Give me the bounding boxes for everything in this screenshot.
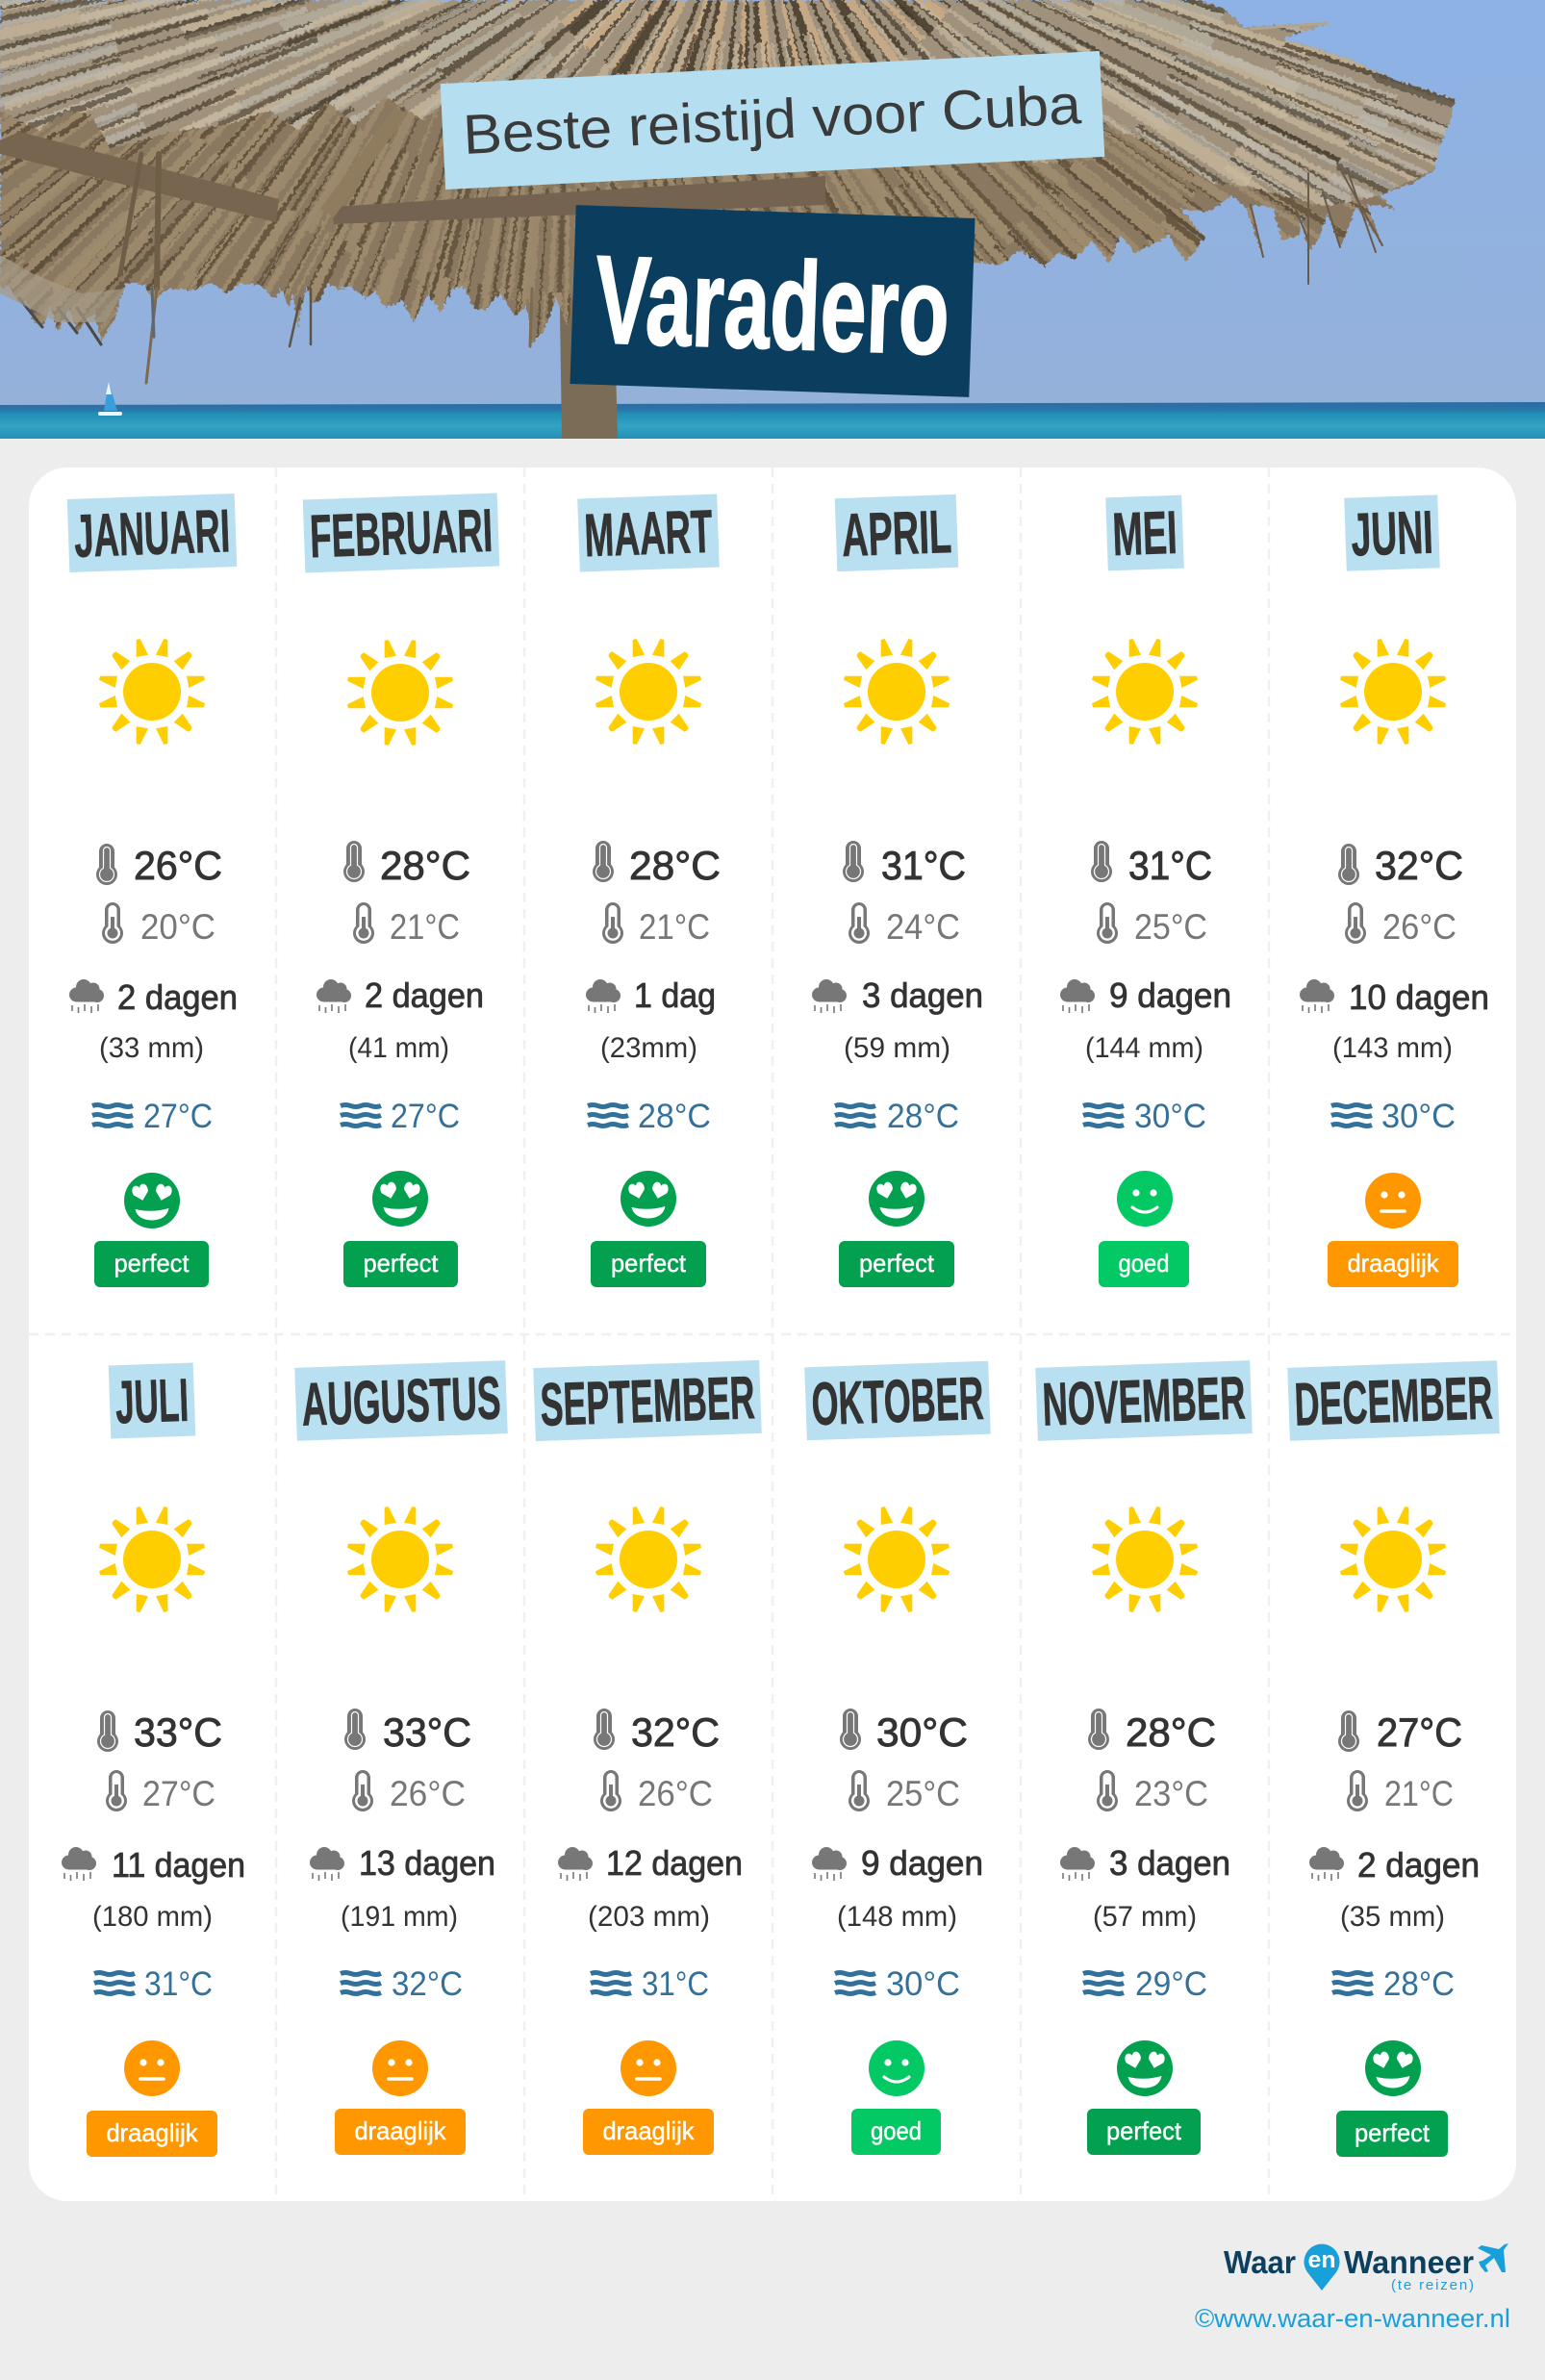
rain days [812, 975, 983, 1015]
max temperature: 33°C [383, 1709, 471, 1755]
rating badge [87, 2111, 217, 2157]
icon: location pin with en [1304, 2244, 1340, 2291]
month heading [577, 494, 720, 572]
min temperature: 21°C [639, 907, 710, 947]
rain days [69, 977, 238, 1017]
logo word: Wanneer: Wanneer [1344, 2244, 1474, 2280]
water temperature: 28°C [1383, 1965, 1455, 2003]
min temperature [848, 902, 960, 947]
max temperature [593, 841, 721, 888]
water temperature [92, 1098, 213, 1135]
water temperature [1332, 1965, 1455, 2003]
rating badge [591, 1241, 706, 1287]
icon: sun [1092, 1506, 1198, 1612]
rating badge [1099, 1241, 1189, 1287]
rating badge: goed [1118, 1249, 1170, 1278]
month heading [835, 494, 958, 571]
min temperature [602, 902, 710, 947]
icon: sun [1340, 639, 1446, 745]
water temperature [341, 1965, 463, 2003]
max temperature: 26°C [134, 843, 222, 888]
month: juni [1300, 494, 1489, 1287]
logo word: Waar: Waar [1224, 2244, 1296, 2280]
min temperature: 20°C [140, 907, 215, 947]
month: januari [67, 494, 238, 1287]
icon: airplane [1478, 2243, 1508, 2272]
panel: climate table card [29, 468, 1516, 2201]
max temperature [1338, 1709, 1462, 1755]
min temperature: 21°C [1384, 1774, 1454, 1813]
min temperature: 26°C [390, 1774, 466, 1813]
sailboat [98, 382, 122, 416]
icon: sun [347, 1506, 453, 1612]
max temperature: 28°C [629, 843, 721, 888]
month heading [67, 494, 237, 572]
month heading: AUGUSTUS [300, 1364, 502, 1439]
water temperature: 28°C [638, 1098, 711, 1135]
rainfall: (35 mm) [1340, 1901, 1445, 1933]
water temperature: 31°C [642, 1965, 709, 2003]
month heading: JUNI [1350, 499, 1434, 569]
rating badge [1328, 1241, 1458, 1287]
rating smiley [1117, 2040, 1173, 2096]
water temperature: 29°C [1135, 1965, 1207, 2003]
max temperature [1088, 1709, 1216, 1755]
rating badge: draaglijk [106, 2118, 198, 2147]
rating badge: perfect [1106, 2116, 1182, 2145]
max temperature: 27°C [1377, 1709, 1462, 1755]
rating badge: perfect [1355, 2118, 1431, 2147]
max temperature: 33°C [134, 1709, 222, 1755]
rating smiley [621, 1171, 676, 1227]
rainfall: (23mm) [600, 1032, 697, 1064]
rating badge [583, 2109, 714, 2155]
max temperature [97, 1709, 222, 1755]
rainfall: (180 mm) [92, 1901, 213, 1933]
max temperature [1338, 843, 1463, 888]
rating badge [1336, 2111, 1448, 2157]
rating badge: perfect [114, 1249, 190, 1278]
rating smiley [1365, 1173, 1421, 1228]
rainfall: (143 mm) [1332, 1032, 1453, 1064]
min temperature [352, 1770, 466, 1813]
rain days: 3 dagen [862, 975, 983, 1015]
rating badge: draaglijk [354, 2116, 446, 2145]
rating badge [851, 2109, 941, 2155]
min temperature: 25°C [1134, 907, 1207, 947]
min temperature [102, 902, 215, 947]
icon: sun [595, 639, 701, 745]
water temperature [1331, 1098, 1456, 1135]
min temperature: 24°C [886, 907, 960, 947]
max temperature [1091, 841, 1212, 888]
water temperature [835, 1965, 960, 2003]
min temperature [600, 1770, 713, 1813]
roof beam centre [332, 176, 825, 224]
icon: sun [844, 639, 950, 745]
max temperature: 31°C [1128, 843, 1212, 888]
water temperature: 30°C [1134, 1098, 1206, 1135]
month heading: MEI [1111, 499, 1178, 569]
roof beam left [0, 132, 279, 222]
month heading [1105, 495, 1184, 570]
icon: sun [347, 640, 453, 746]
logo: Waar en Wanneer [1224, 2243, 1508, 2293]
max temperature [344, 1709, 471, 1755]
sky [0, 0, 1545, 406]
rating smiley [869, 1171, 924, 1227]
rating smiley [124, 1173, 180, 1228]
rainfall: (33 mm) [99, 1032, 204, 1064]
rain days: 10 dagen [1349, 977, 1489, 1017]
title banner: Beste reistijd voor Cuba: Beste reistijd voor Cuba [462, 73, 1083, 166]
title banner: Varadero [570, 205, 975, 397]
rainfall: (191 mm) [341, 1901, 458, 1933]
thatched roof [0, 0, 1455, 343]
month heading [804, 1361, 991, 1440]
month: februari [303, 493, 499, 1287]
max temperature: 31°C [881, 843, 966, 888]
max temperature [343, 841, 470, 888]
max temperature [840, 1709, 968, 1755]
water temperature [835, 1098, 959, 1135]
water temperature: 32°C [392, 1965, 463, 2003]
rating smiley [124, 2040, 180, 2096]
logo tagline: (te reizen) [1391, 2277, 1474, 2293]
month heading [109, 1362, 195, 1439]
month heading: SEPTEMBER [539, 1364, 756, 1439]
rain days: 1 dag [634, 975, 716, 1015]
rating badge [343, 1241, 458, 1287]
rating badge: perfect [859, 1249, 935, 1278]
rainfall: (59 mm) [844, 1032, 950, 1064]
rating badge: perfect [611, 1249, 687, 1278]
rating badge [335, 2109, 466, 2155]
rain days [62, 1845, 245, 1885]
max temperature [594, 1709, 720, 1755]
icon: sun [1092, 639, 1198, 745]
max temperature: 32°C [631, 1709, 720, 1755]
rain days: 2 dagen [1357, 1845, 1480, 1885]
month: maart [577, 494, 721, 1287]
water temperature [588, 1098, 711, 1135]
rating smiley [372, 1171, 428, 1227]
icon: sun [595, 1506, 701, 1612]
month heading [303, 493, 499, 573]
month: augustus [294, 1360, 508, 2155]
rain days [1060, 1843, 1230, 1883]
rating smiley [1117, 1171, 1173, 1227]
diagonal beam [320, 108, 408, 217]
min temperature [353, 902, 460, 947]
month: oktober [804, 1361, 991, 2155]
copyright link text: ©www.waar-en-wanneer.nl [1195, 2304, 1510, 2333]
rainfall: (148 mm) [837, 1901, 957, 1933]
rainfall: (203 mm) [588, 1901, 710, 1933]
rating badge: perfect [364, 1249, 439, 1278]
icon: sun [1340, 1506, 1446, 1612]
month heading: JANUARI [73, 497, 231, 570]
hanging fronds [19, 23, 1382, 383]
month heading: OKTOBER [810, 1365, 985, 1438]
water temperature [591, 1965, 709, 2003]
max temperature: 30°C [876, 1709, 968, 1755]
month heading: MAART [583, 498, 714, 570]
parasol pole [558, 183, 618, 439]
month heading: JULI [114, 1367, 190, 1436]
month heading [294, 1360, 508, 1441]
max temperature [843, 841, 966, 888]
water temperature [1083, 1965, 1207, 2003]
icon: sun [99, 639, 205, 745]
min temperature: 26°C [1382, 907, 1456, 947]
rating badge [1087, 2109, 1201, 2155]
rating badge: goed [871, 2116, 922, 2145]
icon: location pin with en: en [1308, 2247, 1335, 2273]
min temperature: 27°C [142, 1774, 215, 1813]
water temperature: 27°C [391, 1098, 460, 1135]
rating badge [839, 1241, 954, 1287]
min temperature [848, 1770, 960, 1813]
water temperature: 31°C [144, 1965, 213, 2003]
icon: sun [844, 1506, 950, 1612]
cooler roof strip left [0, 255, 125, 322]
rain days: 3 dagen [1109, 1843, 1230, 1883]
month heading: FEBRUARI [309, 497, 494, 570]
rain days: 13 dagen [359, 1843, 495, 1883]
month: mei [1060, 495, 1231, 1287]
rain days: 11 dagen [112, 1845, 245, 1885]
rain days [586, 975, 716, 1015]
min temperature [1097, 1770, 1208, 1813]
rating smiley [1365, 2040, 1421, 2096]
water temperature [1083, 1098, 1206, 1135]
min temperature: 26°C [638, 1774, 713, 1813]
water temperature [341, 1098, 460, 1135]
hero photo: beach parasol [0, 0, 1545, 439]
water temperature [94, 1965, 213, 2003]
month heading: APRIL [841, 498, 952, 570]
month heading: NOVEMBER [1041, 1364, 1247, 1439]
min temperature: 21°C [390, 907, 460, 947]
month heading [1035, 1360, 1253, 1441]
rain days: 2 dagen [117, 977, 238, 1017]
min temperature: 23°C [1134, 1774, 1208, 1813]
month: september [533, 1360, 762, 2155]
rating smiley [372, 2040, 428, 2096]
rain days [317, 975, 484, 1015]
water temperature: 30°C [1381, 1098, 1456, 1135]
water temperature: 28°C [887, 1098, 959, 1135]
min temperature: 25°C [886, 1774, 960, 1813]
rating smiley [621, 2040, 676, 2096]
month heading [1344, 494, 1440, 571]
water temperature: 30°C [886, 1965, 960, 2003]
rainfall: (57 mm) [1093, 1901, 1197, 1933]
sea [0, 402, 1545, 439]
rainfall: (144 mm) [1085, 1032, 1203, 1064]
month heading [533, 1360, 762, 1441]
max temperature: 28°C [1126, 1709, 1216, 1755]
rain days: 12 dagen [606, 1843, 743, 1883]
rain days: 9 dagen [1109, 975, 1231, 1015]
title banner: Beste reistijd voor Cuba [441, 51, 1104, 190]
title banner: Varadero: Varadero [594, 229, 951, 381]
month: december [1287, 1360, 1500, 2157]
rating badge [94, 1241, 209, 1287]
rating badge: draaglijk [602, 2116, 695, 2145]
min temperature [106, 1770, 215, 1813]
min temperature [1347, 1770, 1454, 1813]
rating badge: draaglijk [1347, 1249, 1439, 1278]
water temperature: 27°C [143, 1098, 213, 1135]
month: november [1035, 1360, 1253, 2155]
month: juli [62, 1362, 245, 2157]
min temperature [1345, 902, 1456, 947]
max temperature: 32°C [1375, 843, 1463, 888]
max temperature [96, 843, 222, 888]
max temperature: 28°C [380, 843, 470, 888]
rain days: 2 dagen [365, 975, 484, 1015]
min temperature [1097, 902, 1207, 947]
rain days: 9 dagen [861, 1843, 983, 1883]
rating smiley [869, 2040, 924, 2096]
rainfall: (41 mm) [348, 1032, 449, 1064]
icon: sun [99, 1506, 205, 1612]
month: april [812, 494, 983, 1287]
